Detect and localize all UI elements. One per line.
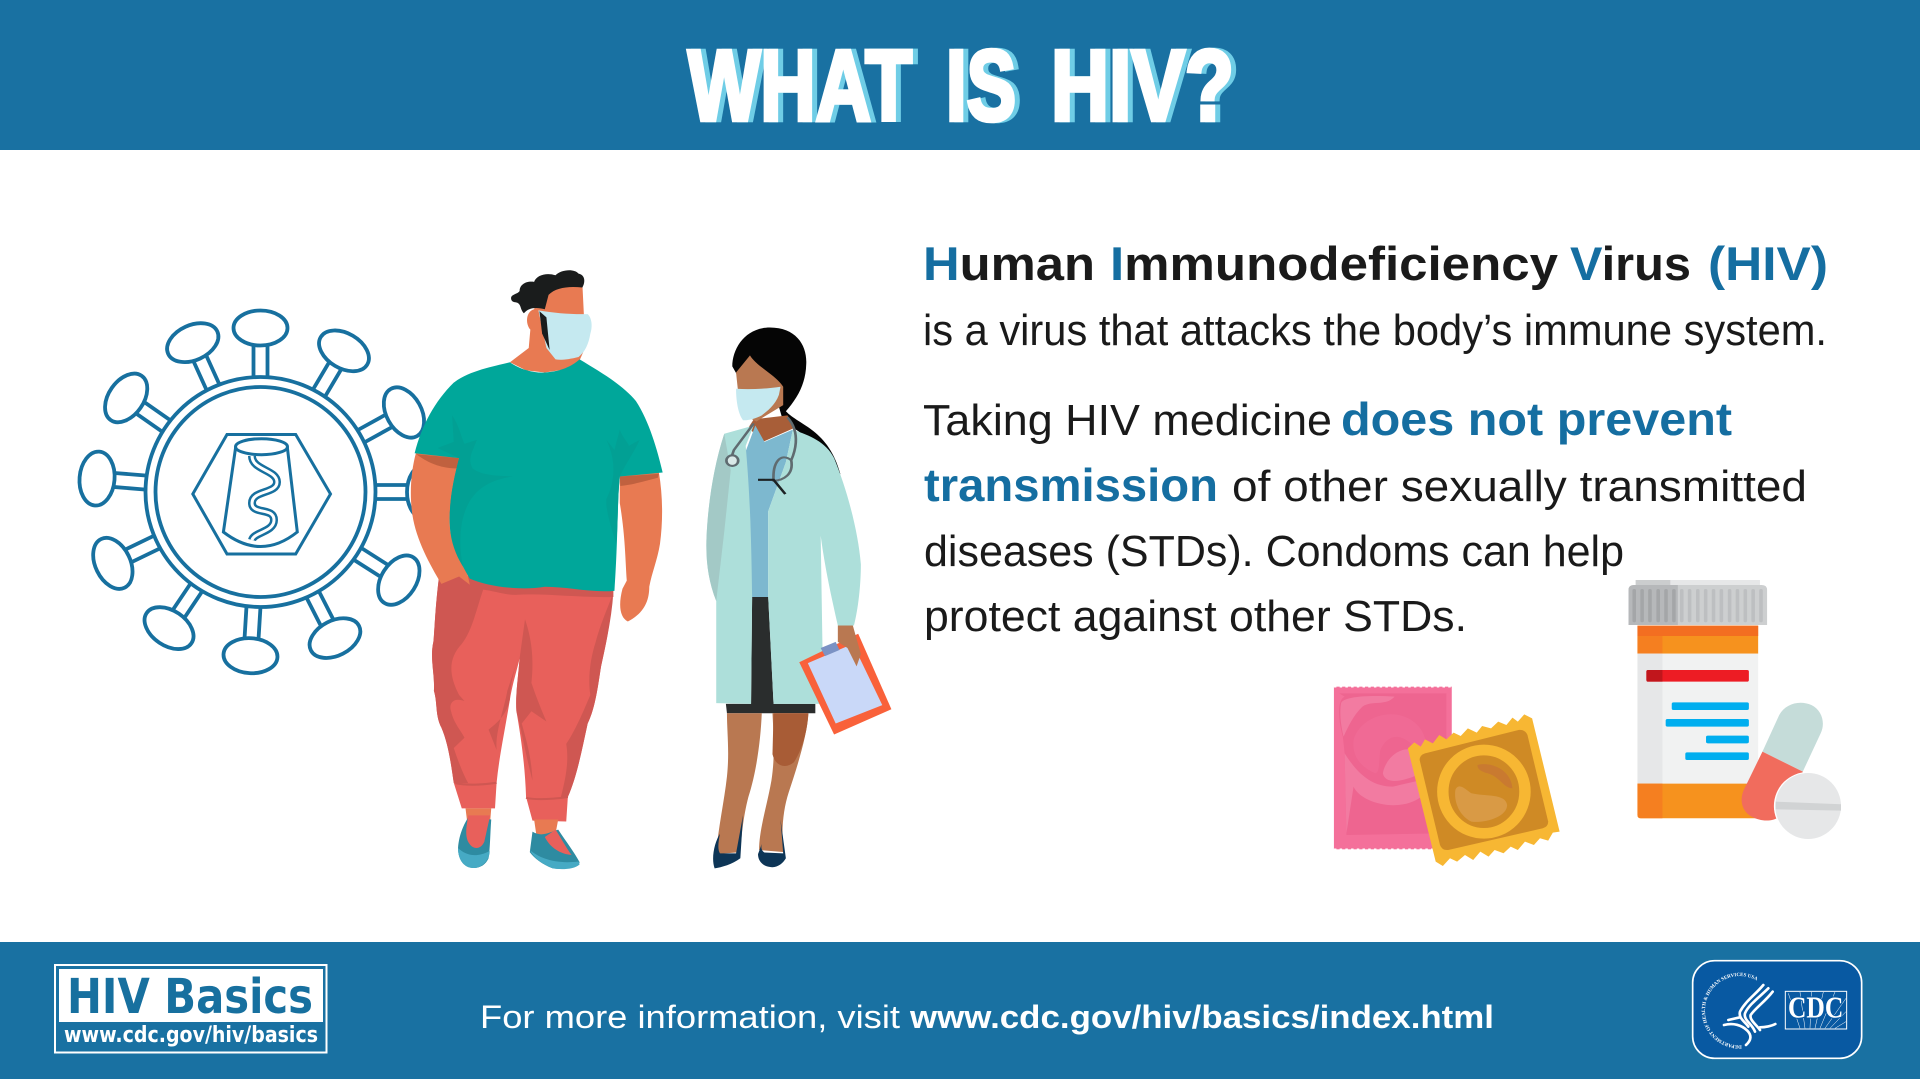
doctor's face	[736, 355, 783, 421]
icon: HIV virus	[77, 310, 442, 675]
CDC mark: CDC	[1788, 990, 1843, 1024]
capsule	[1742, 703, 1823, 821]
man's ankles	[466, 808, 558, 838]
doctor's skirt	[726, 597, 815, 713]
icon: pill bottle and pills	[1629, 580, 1842, 840]
stethoscope	[726, 417, 796, 494]
footer link text	[480, 999, 1494, 1035]
doctor's hair and ponytail	[732, 328, 841, 475]
man's hair	[511, 270, 584, 313]
doctor's legs	[716, 713, 808, 854]
prevention paragraph	[923, 393, 1807, 641]
footer link text: For more information, visit	[480, 999, 900, 1035]
prevention paragraph: does not prevent	[1341, 393, 1732, 445]
man's neck and face	[510, 283, 585, 372]
man's mask	[538, 310, 592, 360]
prevention paragraph: protect against other STDs.	[924, 592, 1467, 641]
title: HIV?	[1051, 30, 1234, 142]
tablet	[1774, 772, 1842, 840]
doctor's lab coat	[706, 426, 861, 704]
HIV Basics badge: www.cdc.gov/hiv/basics	[64, 1023, 318, 1048]
doctor's shoes	[713, 815, 786, 868]
header banner	[0, 0, 1920, 150]
bottle cap	[1629, 580, 1767, 625]
intro text	[923, 237, 1828, 355]
footer link text: www.cdc.gov/hiv/basics/index.html	[909, 999, 1494, 1035]
title	[688, 30, 1234, 142]
prevention paragraph: of other sexually transmitted	[1232, 462, 1807, 511]
bottle body	[1637, 626, 1758, 818]
figure: man in mask	[411, 270, 663, 869]
HIV definition heading: (HIV)	[1708, 237, 1828, 290]
title: WHAT	[688, 30, 912, 142]
HHS and CDC logo	[1692, 960, 1862, 1060]
prevention paragraph: Taking HIV medicine	[923, 396, 1332, 445]
prevention paragraph: transmission	[924, 459, 1218, 511]
HIV definition heading: Human	[923, 237, 1095, 290]
pink packet	[1334, 687, 1452, 849]
HHS seal: DEPARTMENT OF HEALTH & HUMAN SERVICES USA	[1702, 972, 1757, 1049]
doctor's scrubs	[745, 426, 793, 598]
man's arms	[411, 452, 662, 621]
yellow packet	[1408, 714, 1560, 866]
doctor's neck	[748, 415, 795, 442]
man's shoes	[458, 815, 580, 869]
man's pants	[432, 575, 613, 821]
HIV definition line: is a virus that attacks the body’s immune system.	[923, 306, 1827, 355]
HIV definition heading: Immunodeficiency	[1110, 237, 1558, 290]
clipboard	[799, 626, 891, 735]
HIV Basics badge	[55, 965, 326, 1052]
prevention paragraph: diseases (STDs). Condoms can help	[924, 527, 1624, 576]
footer banner	[0, 942, 1920, 1079]
icon: condom packets	[1334, 687, 1560, 866]
HIV definition heading: Virus	[1570, 237, 1691, 290]
doctor's mask	[736, 387, 781, 420]
figure: doctor	[706, 328, 891, 868]
HIV definition heading	[923, 237, 1828, 290]
title: IS	[946, 30, 1016, 142]
HIV Basics badge: HIV Basics	[67, 969, 313, 1025]
man's shirt	[415, 359, 663, 591]
